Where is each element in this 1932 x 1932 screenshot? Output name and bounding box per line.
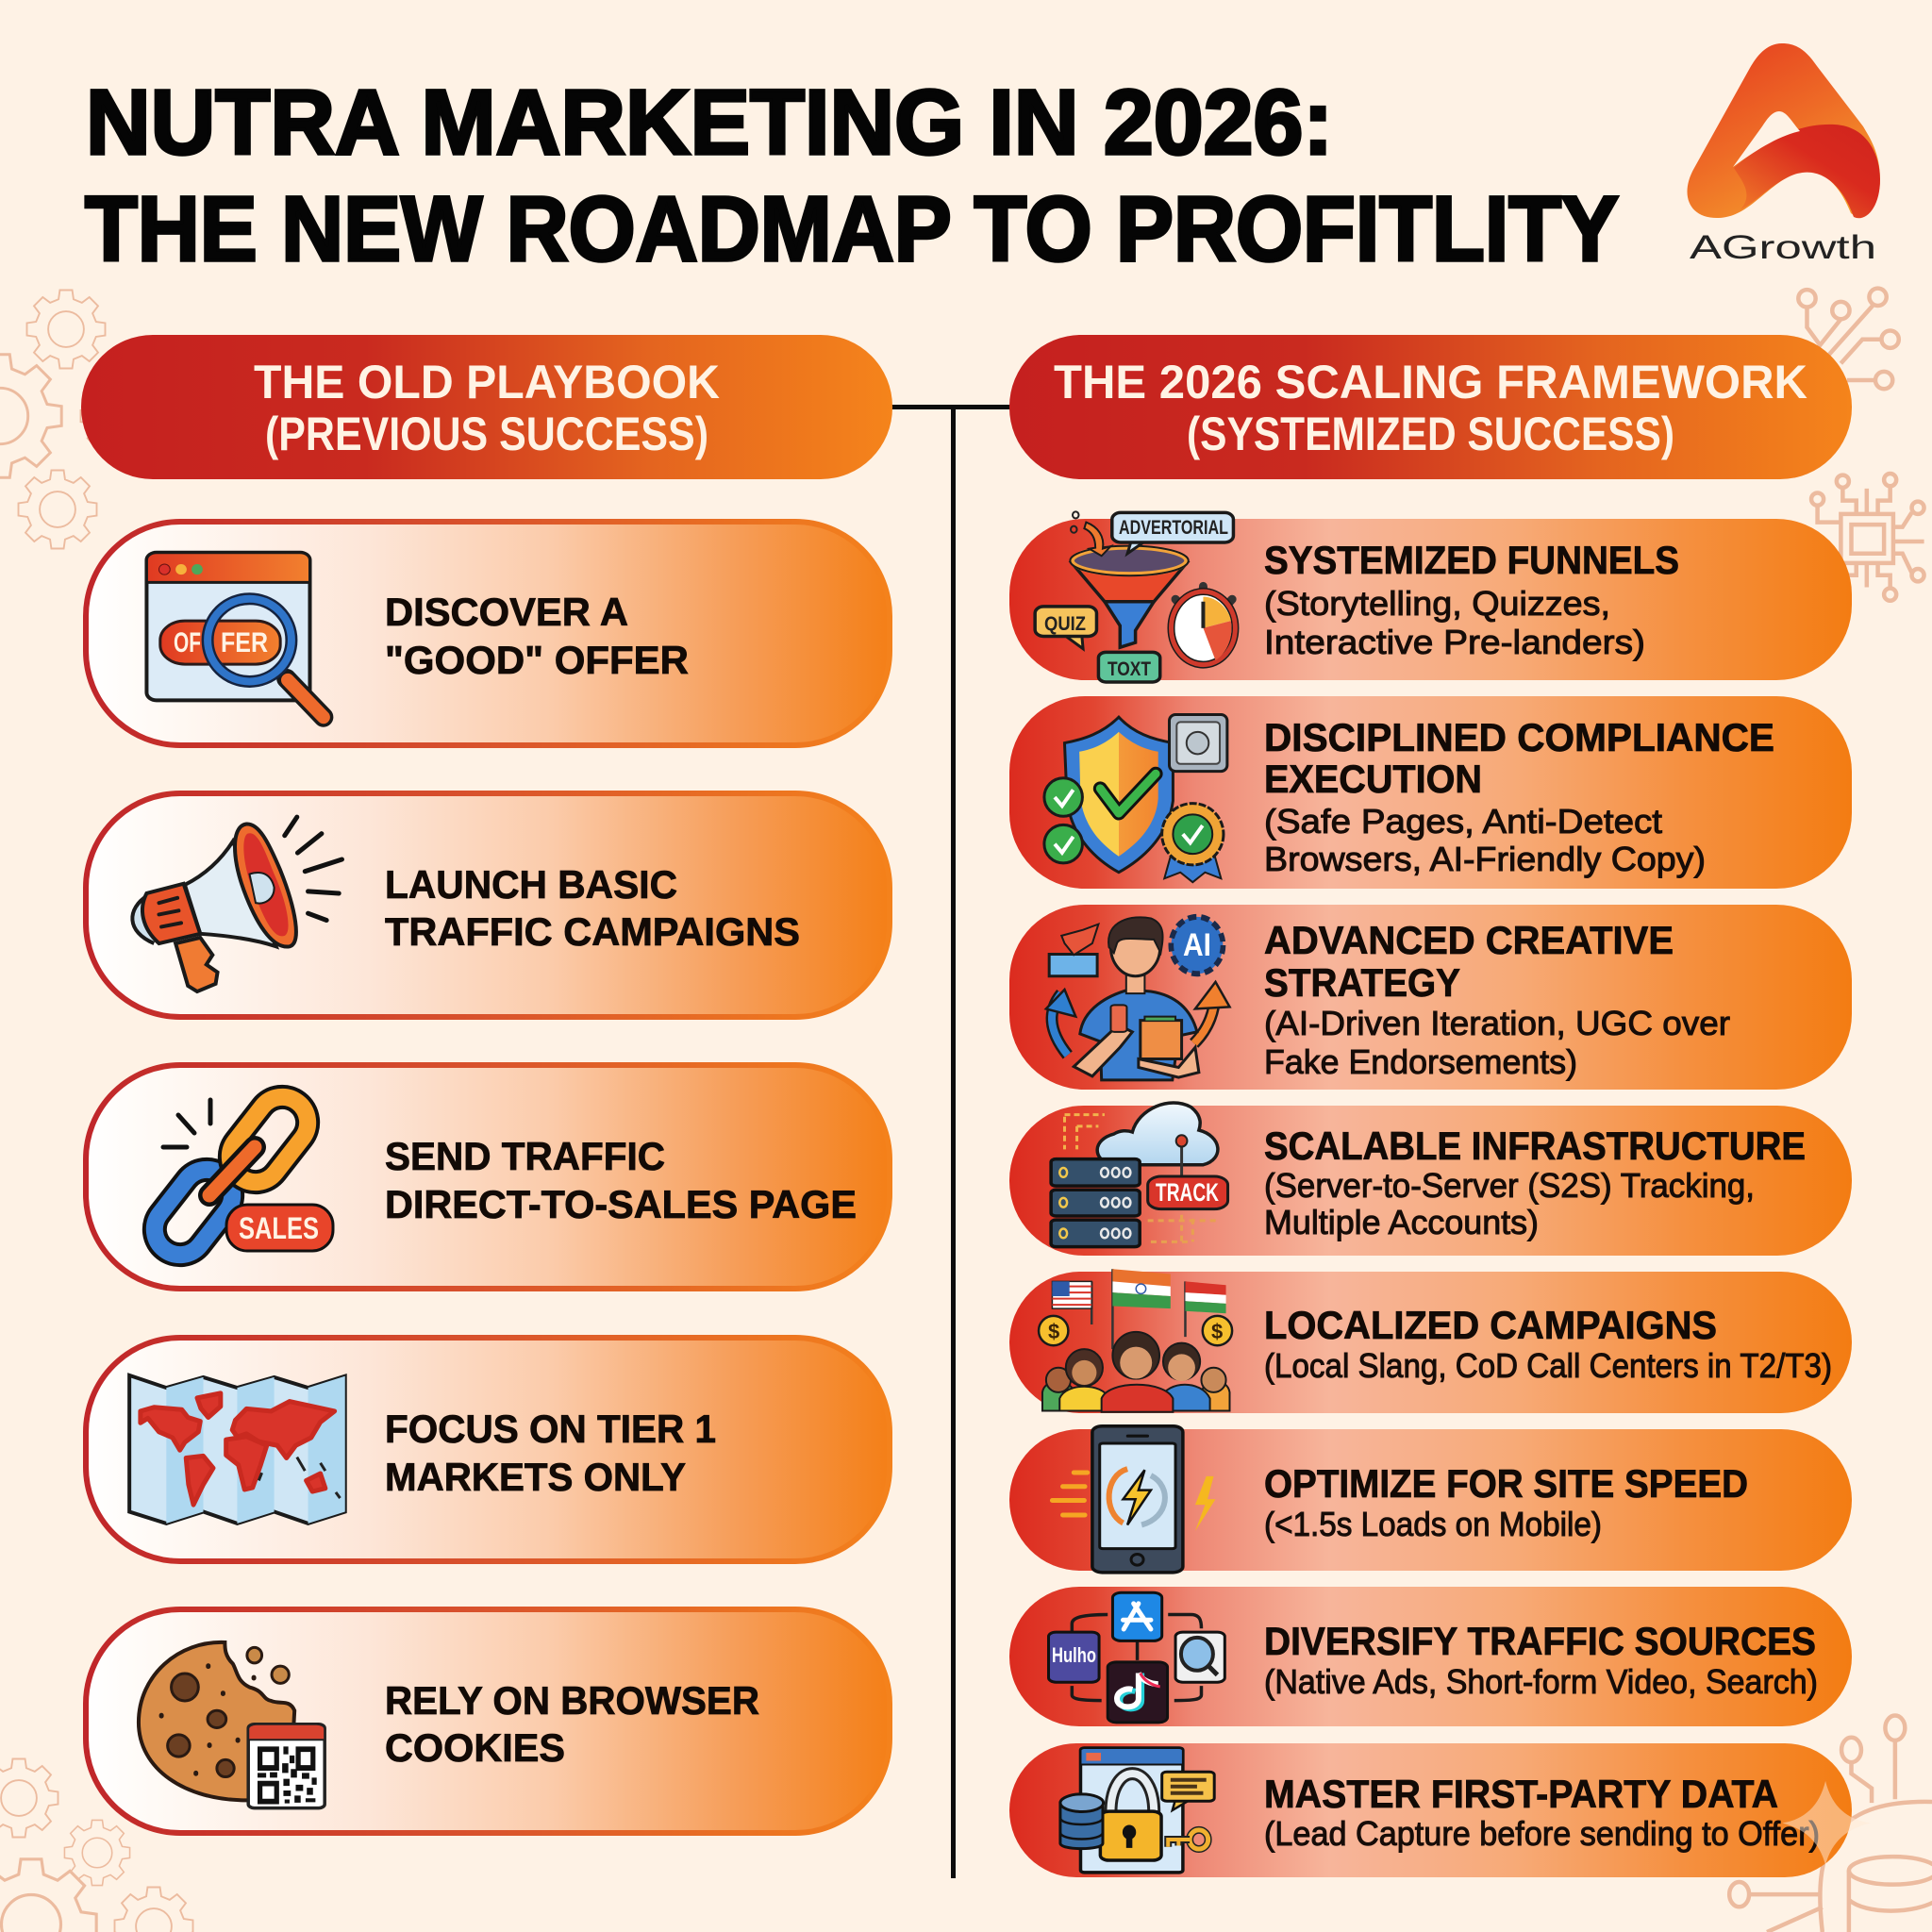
label (385, 1678, 759, 1770)
title: NUTRA MARKETING IN 2026: (86, 71, 1333, 174)
panel: send traffic direct to sales page (86, 1065, 890, 1289)
label: EXECUTION (1264, 757, 1482, 801)
label (1264, 1461, 1748, 1543)
label: ADVANCED CREATIVE (1264, 918, 1674, 962)
icon: chain links with sales tag (144, 1087, 333, 1265)
label: (<1.5s Loads on Mobile) (1264, 1505, 1602, 1543)
logo wordmark: AGrowth (1690, 229, 1876, 266)
label: (Server-to-Server (S2S) Tracking, (1264, 1166, 1755, 1205)
icon: cloud, servers and track tag (1051, 1103, 1228, 1247)
decorative gears bottom left (0, 1759, 192, 1932)
label (385, 862, 800, 954)
label: (AI-Driven Iteration, UGC over (1264, 1004, 1730, 1042)
panel: old playbook header (81, 335, 892, 479)
label (385, 1134, 857, 1226)
pill (86, 1609, 890, 1833)
icon: person with AI gear: AI (1183, 927, 1211, 963)
label (1264, 1303, 1832, 1385)
label: TRAFFIC CAMPAIGNS (385, 909, 800, 954)
icon: flags and people: $ (1211, 1320, 1223, 1343)
label: Fake Endorsements) (1264, 1042, 1577, 1081)
label (385, 1407, 716, 1499)
label (1264, 1619, 1818, 1701)
label: DISCOVER A (385, 590, 628, 634)
label: DIVERSIFY TRAFFIC SOURCES (1264, 1619, 1816, 1663)
pill (1009, 905, 1852, 1090)
pill (1009, 1587, 1852, 1726)
label: COOKIES (385, 1725, 565, 1770)
label (1264, 715, 1774, 878)
label: DISCIPLINED COMPLIANCE (1264, 715, 1774, 759)
panel: diversify traffic sources (1009, 1587, 1852, 1726)
decorative circuit top right (1798, 289, 1899, 389)
panel: scaling framework header: THE 2026 SCALING FRAMEWORK (1054, 356, 1807, 408)
icon: world map (129, 1375, 345, 1524)
label: LOCALIZED CAMPAIGNS (1264, 1303, 1717, 1347)
label: (Local Slang, CoD Call Centers in T2/T3) (1264, 1346, 1832, 1385)
icon: browser with offer and magnifier (146, 553, 324, 717)
icon: flags and people (1039, 1269, 1232, 1412)
panel: systemized funnels (1009, 511, 1852, 682)
icon: chain links with sales tag: SALES (239, 1211, 319, 1245)
panel: launch basic traffic campaigns (86, 793, 890, 1017)
label: (Native Ads, Short-form Video, Search) (1264, 1662, 1818, 1701)
icon: megaphone (132, 817, 341, 991)
label: (Storytelling, Quizzes, (1264, 584, 1610, 623)
icon: traffic source tiles (1049, 1592, 1224, 1723)
label: Interactive Pre-landers) (1264, 623, 1645, 661)
label (385, 590, 689, 682)
icon: funnel with bubbles and stopwatch: TOXT (1108, 658, 1151, 680)
label: OPTIMIZE FOR SITE SPEED (1264, 1461, 1748, 1506)
title: THE NEW ROADMAP TO PROFITLITY (85, 177, 1619, 280)
label: SEND TRAFFIC (385, 1134, 665, 1178)
icon: padlock, browser and database (1060, 1748, 1214, 1873)
pill (86, 522, 890, 745)
icon: funnel with bubbles and stopwatch (1035, 511, 1235, 682)
label: Multiple Accounts) (1264, 1203, 1539, 1241)
panel: old playbook header: THE OLD PLAYBOOK (254, 356, 720, 408)
label: FOCUS ON TIER 1 (385, 1407, 716, 1451)
decorative gears top left (0, 291, 156, 548)
label: RELY ON BROWSER (385, 1678, 759, 1723)
connector lines (891, 405, 1011, 1878)
icon: flags and people: $ (1048, 1320, 1059, 1343)
panel: scaling framework header: (SYSTEMIZED SUCCESS) (1187, 408, 1674, 460)
panel: discover a good offer (86, 522, 890, 745)
label: "GOOD" OFFER (385, 638, 689, 682)
icon: browser with offer and magnifier: OF (174, 627, 201, 658)
pill (1009, 519, 1852, 680)
pill (1009, 1429, 1852, 1571)
panel: localized campaigns (1009, 1269, 1852, 1413)
label: SCALABLE INFRASTRUCTURE (1264, 1124, 1806, 1168)
pill (86, 1065, 890, 1289)
panel: scaling framework header (1009, 335, 1852, 479)
panel: disciplined compliance execution (1009, 696, 1852, 889)
icon: browser with offer and magnifier: FER (221, 627, 268, 658)
icon: cloud, servers and track tag: TRACK (1156, 1178, 1219, 1207)
pill (1009, 1743, 1852, 1877)
watermark sparkle (1782, 1781, 1871, 1865)
decorative chip right (1811, 474, 1924, 601)
icon: funnel with bubbles and stopwatch: QUIZ (1044, 613, 1086, 635)
icon: traffic source tiles: Hulho (1052, 1643, 1096, 1667)
label: LAUNCH BASIC (385, 862, 677, 907)
label: (Safe Pages, Anti-Detect (1264, 802, 1662, 841)
pill (1009, 1106, 1852, 1256)
label: DIRECT-TO-SALES PAGE (385, 1182, 857, 1226)
pill (1009, 696, 1852, 889)
icon: cookie with QR card (139, 1642, 325, 1808)
panel: optimize for site speed (1009, 1426, 1852, 1573)
label (1264, 1124, 1806, 1241)
pill (86, 793, 890, 1017)
label: (Lead Capture before sending to Offer) (1264, 1814, 1820, 1853)
pill (1009, 1272, 1852, 1413)
icon: funnel with bubbles and stopwatch: ADVERTORIAL (1119, 517, 1228, 539)
icon: shield, safe, checks and badge (1044, 715, 1227, 882)
label: Browsers, AI-Friendly Copy) (1264, 840, 1706, 878)
panel: master first-party data (1009, 1743, 1852, 1877)
pill (86, 1338, 890, 1561)
label (1264, 1772, 1820, 1853)
panel: focus on tier 1 markets (86, 1338, 890, 1561)
decorative circuit and database bottom right (1729, 1715, 1932, 1932)
label: MARKETS ONLY (385, 1455, 686, 1499)
title (85, 71, 1619, 280)
label (1264, 918, 1730, 1081)
label: MASTER FIRST-PARTY DATA (1264, 1772, 1778, 1816)
panel: old playbook header: (PREVIOUS SUCCESS) (265, 408, 708, 460)
icon: person with AI gear (1046, 917, 1230, 1080)
panel: rely on browser cookies (86, 1609, 890, 1833)
panel: advanced creative strategy (1009, 905, 1852, 1090)
logo mark (1687, 43, 1880, 218)
icon: smartphone with lightning (1052, 1426, 1216, 1573)
panel: scalable infrastructure (1009, 1103, 1852, 1256)
label (1264, 538, 1679, 661)
label: STRATEGY (1264, 960, 1460, 1005)
label: SYSTEMIZED FUNNELS (1264, 538, 1679, 582)
logo (1687, 43, 1880, 266)
